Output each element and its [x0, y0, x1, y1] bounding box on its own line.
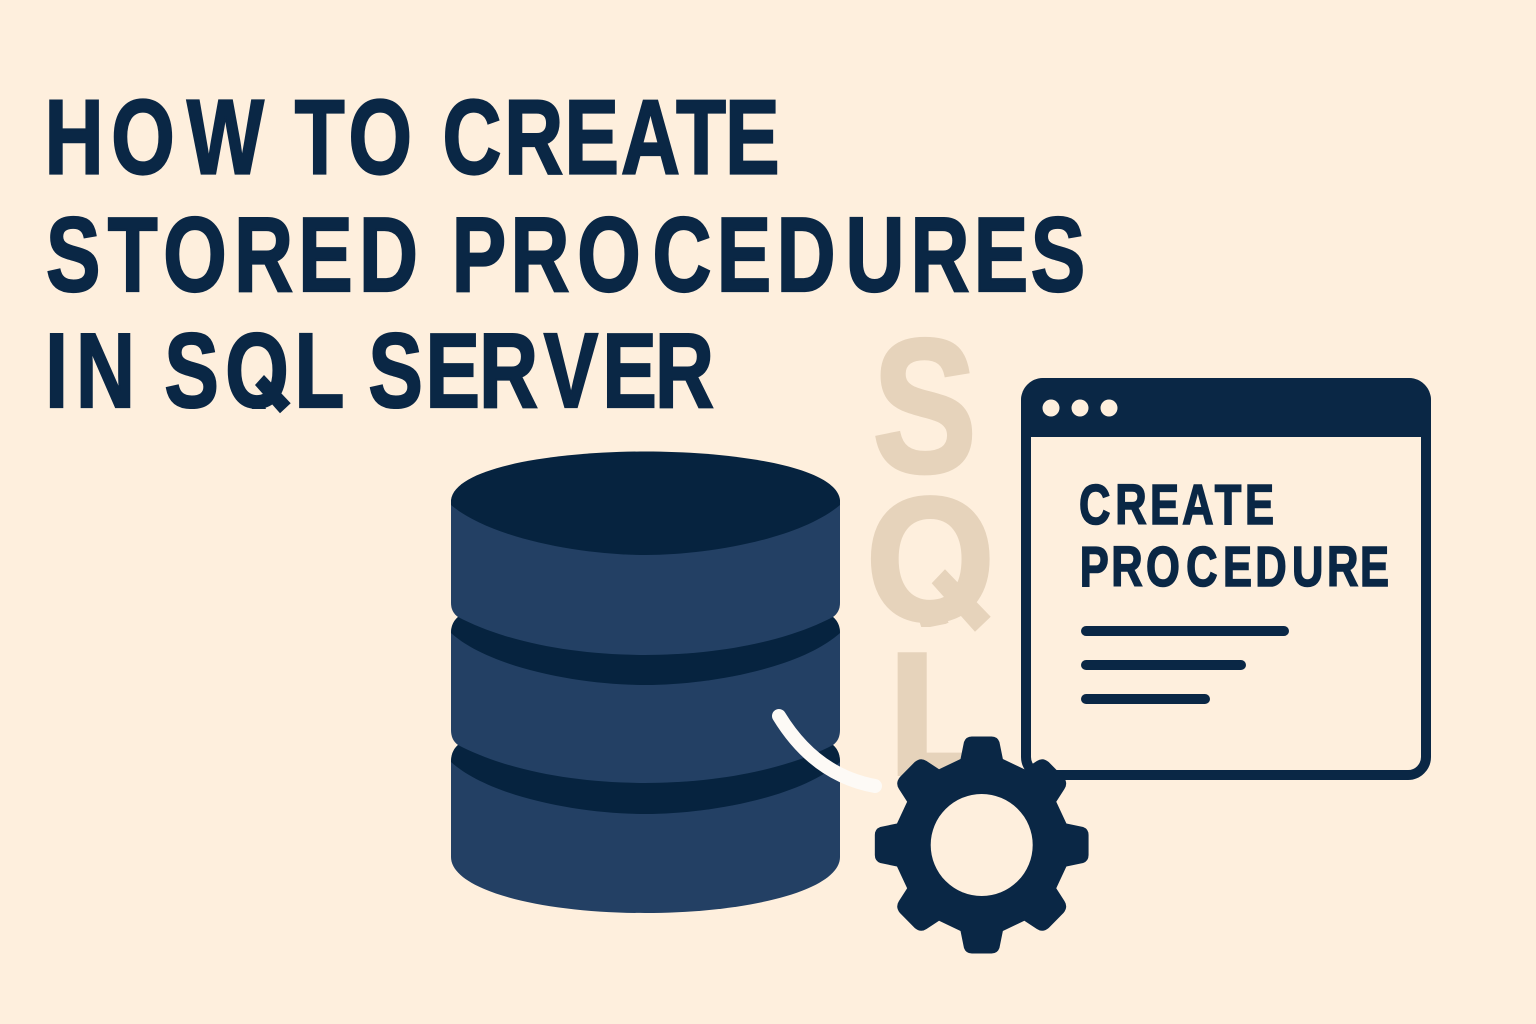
- top disc: [451, 452, 840, 655]
- watermark: vertical SQL letters: L: [888, 616, 994, 811]
- infographic canvas: [47, 98, 1431, 954]
- window title bar: [1021, 378, 1431, 437]
- title: IN SQL SERVER: [45, 312, 714, 431]
- icon: database cylinder: [451, 452, 840, 913]
- window frame: [1026, 383, 1426, 775]
- code label: PROCEDURE: [1080, 534, 1389, 598]
- code label: [1079, 472, 1389, 598]
- arrow: white connector from database to gear: [779, 716, 875, 786]
- code lines: [1086, 631, 1284, 699]
- watermark: vertical SQL letters: Q: [866, 461, 995, 658]
- bottom disc: [451, 745, 840, 913]
- icon: gear: [875, 736, 1089, 954]
- title: STORED PROCEDURES: [46, 196, 1085, 315]
- code label: CREATE: [1079, 472, 1274, 536]
- panel: code window: [1021, 378, 1431, 775]
- title: HOW TO CREATE: [45, 78, 780, 197]
- title: [47, 98, 1083, 414]
- middle disc: [451, 617, 840, 783]
- window control dots: [1042, 400, 1118, 416]
- watermark: vertical SQL letters: [871, 336, 990, 776]
- watermark: vertical SQL letters: S: [873, 300, 977, 512]
